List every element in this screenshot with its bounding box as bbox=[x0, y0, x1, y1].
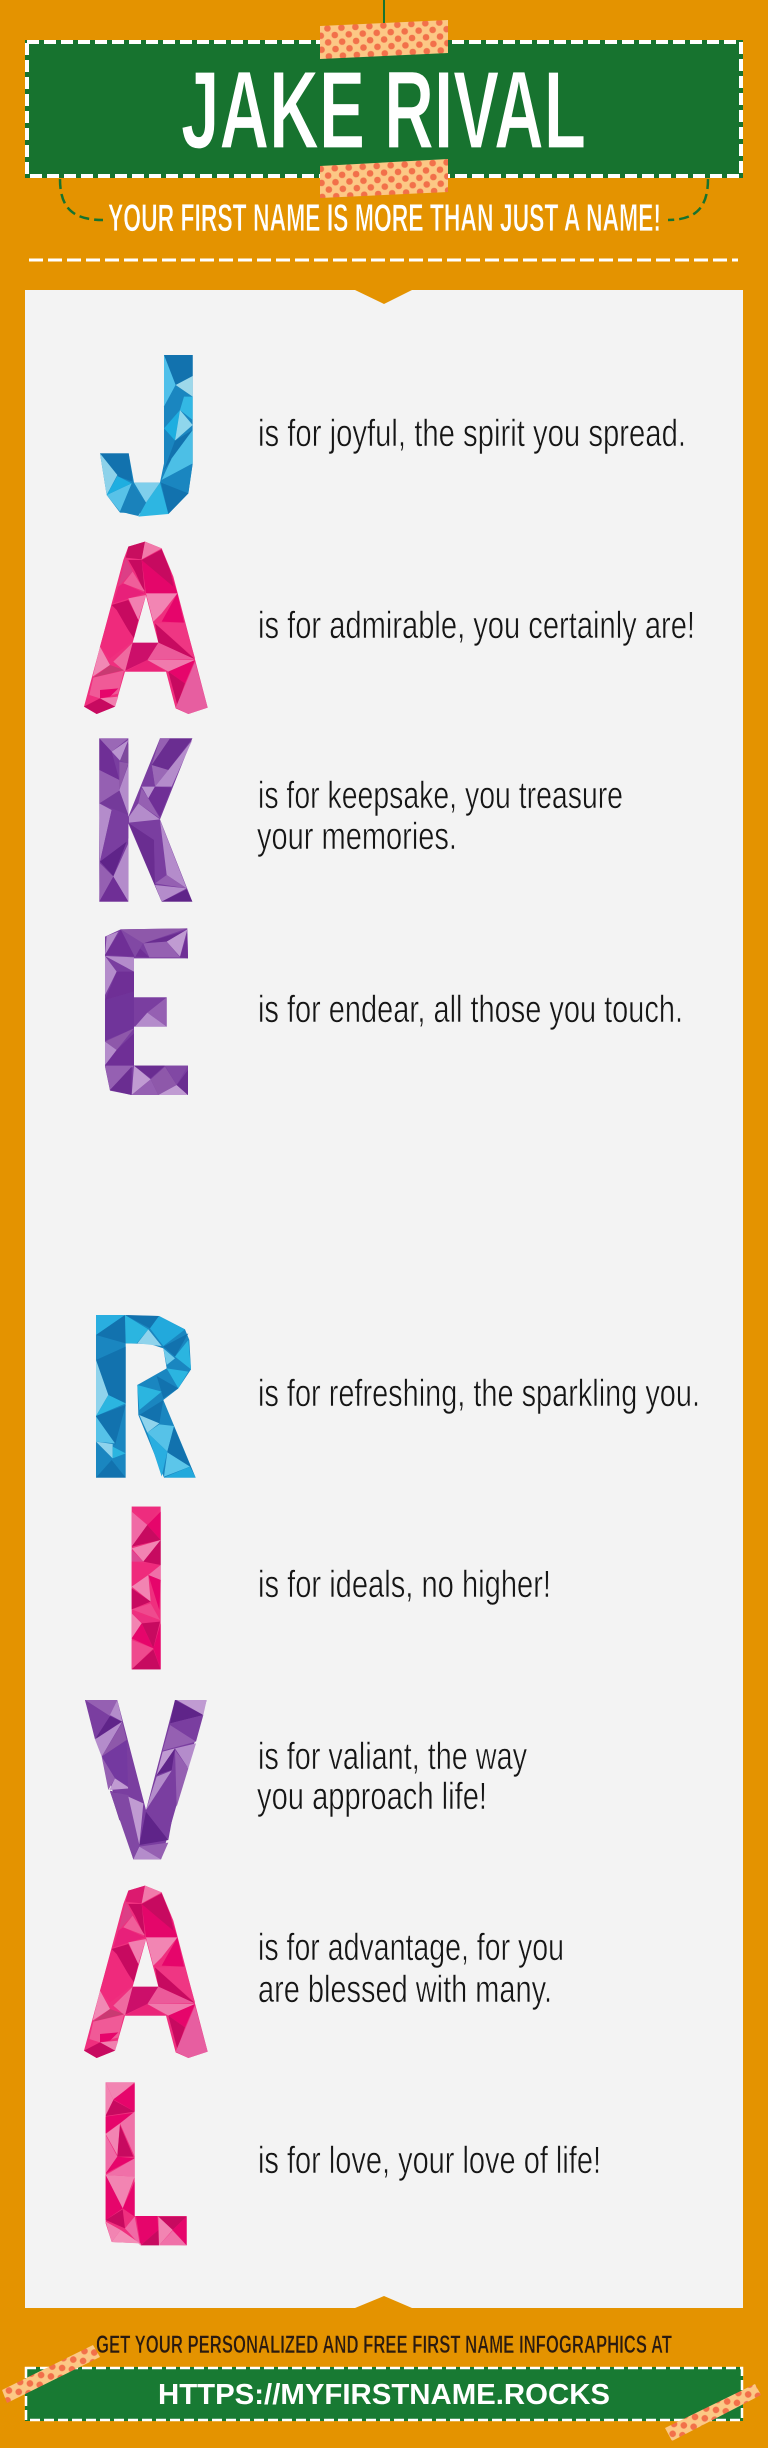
row: R bbox=[96, 1315, 700, 1478]
row: V bbox=[85, 1700, 527, 1859]
row: J bbox=[100, 355, 686, 517]
icon: low-poly letter V bbox=[85, 1700, 207, 1859]
tape: middle bbox=[320, 159, 448, 198]
icon: low-poly letter E bbox=[105, 928, 188, 1095]
icon: low-poly letter K bbox=[99, 738, 192, 902]
text: A second: is for advantage, for you bbox=[258, 1927, 564, 1969]
row: E bbox=[105, 928, 683, 1095]
row: L bbox=[106, 2082, 601, 2245]
connector left bbox=[60, 179, 103, 220]
icon: low-poly letter R bbox=[96, 1315, 196, 1478]
hanging string bbox=[383, 0, 385, 26]
tape: bottom right bbox=[665, 2384, 761, 2441]
tape: top bbox=[320, 20, 448, 59]
text: K: is for keepsake, you treasure bbox=[258, 775, 623, 817]
text: K: your memories. bbox=[257, 816, 457, 858]
icon: low-poly letter L bbox=[106, 2082, 187, 2245]
text: V: you approach life! bbox=[257, 1776, 487, 1818]
icon: low-poly letter I bbox=[132, 1507, 161, 1669]
text: I: is for ideals, no higher! bbox=[258, 1564, 551, 1606]
row: A second bbox=[84, 1886, 564, 2058]
text: L: is for love, your love of life! bbox=[258, 2140, 601, 2182]
url: HTTPS://MYFIRSTNAME.ROCKS bbox=[158, 2379, 610, 2411]
icon: low-poly letter A bbox=[84, 1886, 208, 2058]
tape: bottom left bbox=[2, 2345, 100, 2403]
icon: low-poly letter J bbox=[100, 355, 193, 517]
row: A bbox=[84, 542, 695, 714]
row: I bbox=[132, 1507, 551, 1669]
panel: letters bbox=[25, 290, 743, 2308]
text: V: is for valiant, the way bbox=[258, 1736, 527, 1778]
footer url banner bbox=[25, 2367, 743, 2421]
text: A second: are blessed with many. bbox=[258, 1969, 552, 2011]
icon: low-poly letter A bbox=[84, 542, 208, 714]
connector right bbox=[668, 179, 708, 220]
row: K bbox=[99, 738, 623, 902]
title banner bbox=[25, 40, 743, 178]
